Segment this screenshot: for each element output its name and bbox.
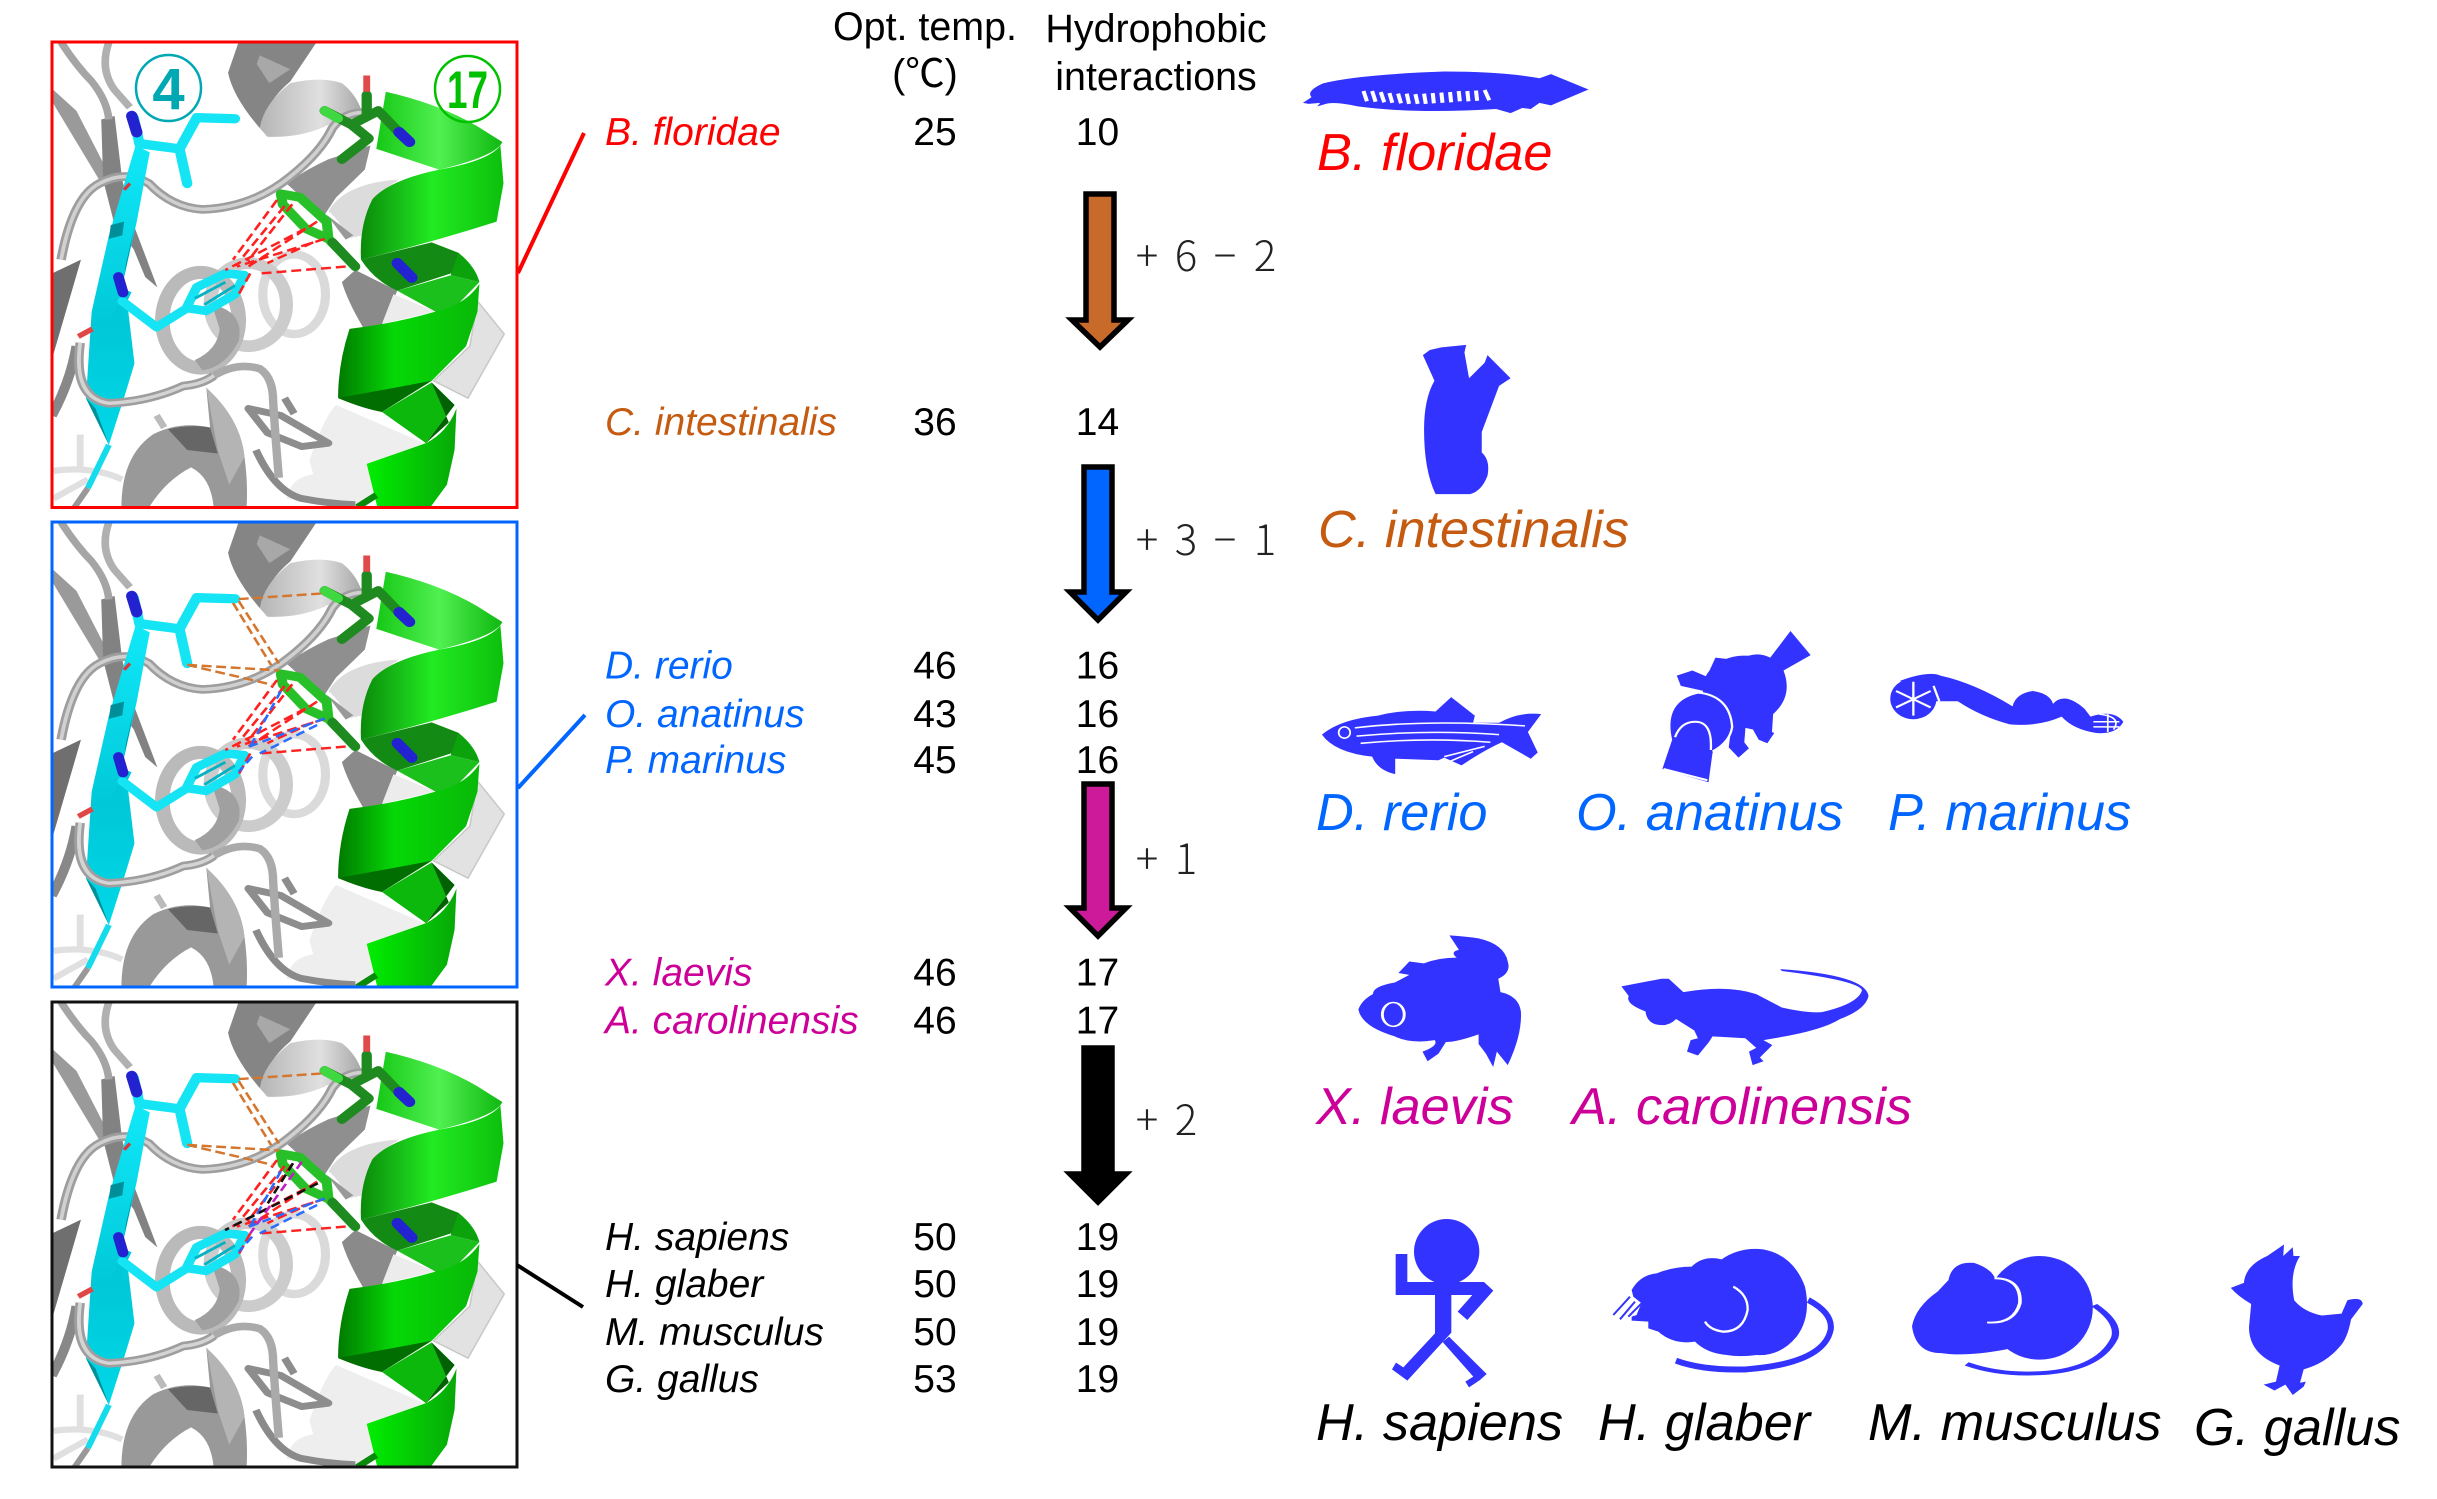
change label: +1: +: [1136, 826, 1158, 887]
icon: sea squirt: [1423, 345, 1511, 494]
connector: black panel to mammal group: [517, 1265, 583, 1307]
icon: human: [1392, 1219, 1493, 1387]
species table: optimum temperatures: 45: [913, 739, 957, 782]
species table: optimum temperatures: 53: [913, 1358, 957, 1401]
species table: hydrophobic interaction counts: 19: [1076, 1263, 1119, 1306]
change label: +2: +: [1136, 1087, 1158, 1148]
icon: lancelet: [1303, 72, 1588, 113]
arrow: brown, C. intestinalis step: [1072, 194, 1128, 347]
change label: +6 -2: 6: [1175, 223, 1197, 284]
species table: optimum temperatures: 43: [913, 693, 957, 736]
species table: optimum temperatures: 50: [913, 1263, 957, 1306]
label: O. anatinus: O. anatinus: [1576, 784, 1843, 842]
residue label: circled 4: [136, 55, 201, 122]
species table: hydrophobic interaction counts: 16: [1076, 693, 1119, 736]
change label: +6 -2: −: [1214, 223, 1236, 284]
panel: fish-level protein structure (blue frame): [52, 522, 517, 991]
species table: names: C. intestinalis: [605, 401, 837, 444]
species table: names: G. gallus: [605, 1358, 759, 1401]
column heading: hydrophobic interactions: interactions: [1055, 55, 1257, 99]
species table: hydrophobic interaction counts: 19: [1076, 1216, 1119, 1259]
label: X. laevis: X. laevis: [1315, 1078, 1514, 1136]
column heading: hydrophobic interactions: Hydrophobic: [1045, 7, 1267, 51]
column heading: optimum temperature: (℃): [892, 52, 958, 96]
icon: anole lizard: [1621, 969, 1869, 1065]
residue label: circled 17: 17: [447, 61, 488, 120]
label: H. sapiens: H. sapiens: [1316, 1394, 1563, 1452]
species table: hydrophobic interaction counts: 17: [1076, 952, 1119, 994]
residue label: circled 17: [435, 56, 500, 122]
label: M. musculus: M. musculus: [1868, 1394, 2162, 1452]
change label: +6 -2: 2: [1254, 223, 1276, 284]
column heading: optimum temperature: Opt. temp.: [833, 5, 1017, 49]
label: D. rerio: D. rerio: [1316, 784, 1487, 842]
species table: names: H. glaber: [605, 1263, 765, 1306]
species table: optimum temperatures: 25: [913, 111, 957, 154]
species table: optimum temperatures: 46: [913, 644, 957, 688]
species table: hydrophobic interaction counts: [1076, 111, 1119, 1401]
species table: names: D. rerio: [605, 644, 733, 688]
icon: zebrafish: [1322, 697, 1541, 774]
change label: +6 -2: +: [1136, 223, 1158, 284]
species table: optimum temperatures: 50: [913, 1216, 957, 1259]
label: B. floridae: B. floridae: [1317, 124, 1552, 182]
icon: chicken: [2231, 1245, 2363, 1395]
panel: B. floridae protein structure (red frame): [52, 42, 517, 511]
connector: red panel to B. floridae: [518, 133, 584, 273]
species table: optimum temperatures: [913, 111, 957, 1401]
label: H. glaber: H. glaber: [1598, 1394, 1813, 1452]
label: P. marinus: P. marinus: [1888, 784, 2131, 842]
species table: hydrophobic interaction counts: 19: [1076, 1358, 1119, 1401]
icon: mouse: [1912, 1256, 2116, 1374]
species table: optimum temperatures: 46: [913, 1000, 957, 1042]
panel: mammal-level protein structure (black frame): [52, 1002, 517, 1471]
arrow: black, mammal/bird step: [1070, 1048, 1126, 1202]
icon: frog: [1358, 935, 1521, 1067]
icon: naked mole rat: [1613, 1249, 1831, 1369]
species table: hydrophobic interaction counts: 10: [1076, 111, 1119, 154]
species table: names: [603, 111, 859, 1401]
species table: names: P. marinus: [605, 739, 786, 782]
arrow: magenta, amphibian/reptile step: [1070, 784, 1126, 936]
connector: blue panel to fish group: [518, 715, 585, 788]
change label: +3 -1: 3: [1175, 507, 1197, 568]
species table: hydrophobic interaction counts: 16: [1076, 739, 1119, 782]
icon: platypus: [1662, 631, 1811, 782]
species table: hydrophobic interaction counts: 16: [1076, 644, 1119, 688]
species table: names: X. laevis: [604, 952, 752, 994]
label: C. intestinalis: C. intestinalis: [1318, 501, 1629, 559]
species table: hydrophobic interaction counts: 14: [1076, 401, 1119, 444]
species table: names: B. floridae: [605, 111, 781, 154]
residue label: circled 4: 4: [152, 57, 185, 122]
label: G. gallus: G. gallus: [2194, 1399, 2400, 1457]
label: A. carolinensis: A. carolinensis: [1569, 1078, 1912, 1136]
species table: hydrophobic interaction counts: 19: [1076, 1311, 1119, 1354]
species table: names: O. anatinus: [605, 693, 804, 736]
species table: optimum temperatures: 46: [913, 952, 957, 994]
change label: +2: 2: [1175, 1087, 1197, 1148]
species table: optimum temperatures: 36: [913, 401, 957, 444]
icon: lamprey: [1890, 674, 2123, 733]
species table: hydrophobic interaction counts: 17: [1076, 1000, 1119, 1042]
species table: names: A. carolinensis: [603, 1000, 859, 1042]
change label: +1: 1: [1175, 826, 1197, 887]
arrow: blue, fish step: [1070, 467, 1126, 620]
species table: optimum temperatures: 50: [913, 1311, 957, 1354]
change label: +3 -1: −: [1214, 507, 1236, 568]
species table: names: H. sapiens: [605, 1216, 789, 1259]
species table: names: M. musculus: [605, 1311, 824, 1354]
change label: +3 -1: 1: [1254, 507, 1276, 568]
change label: +3 -1: +: [1136, 507, 1158, 568]
